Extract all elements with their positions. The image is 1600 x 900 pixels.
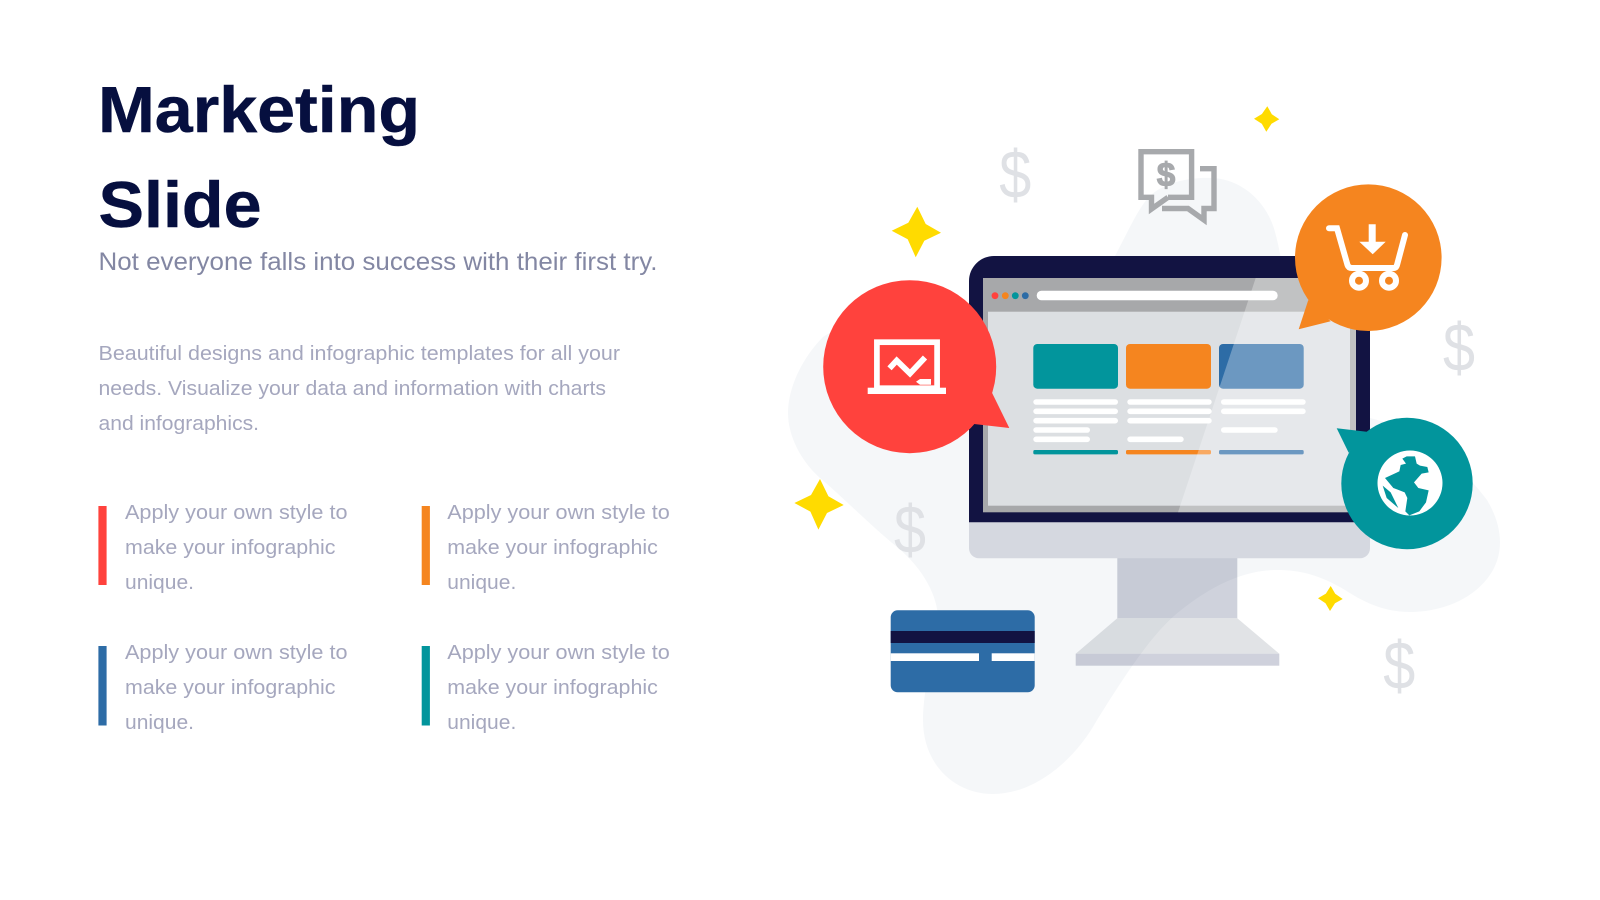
bubble: orange cart bbox=[1295, 184, 1442, 331]
list item: red: Apply your own style to bbox=[125, 501, 348, 524]
icon: globe bbox=[1378, 450, 1442, 516]
body paragraph bbox=[98, 342, 620, 435]
title: Slide bbox=[98, 168, 262, 241]
dollar sign: right: $ bbox=[1443, 310, 1475, 386]
list item: teal bbox=[422, 641, 670, 734]
star: small bottom bbox=[1318, 586, 1343, 611]
icon: shopping cart with arrow bbox=[1329, 224, 1405, 288]
body paragraph: and infographics. bbox=[98, 412, 259, 435]
browser page bbox=[988, 312, 1350, 506]
list item: blue bbox=[98, 641, 348, 734]
list item: orange: unique. bbox=[447, 571, 516, 594]
browser frame bbox=[983, 278, 1356, 512]
list item: red bbox=[98, 501, 348, 594]
star: large left bbox=[794, 479, 844, 530]
progress bars bbox=[1033, 450, 1304, 454]
title: Marketing bbox=[98, 73, 420, 146]
bubble: red chart bbox=[823, 280, 1009, 453]
list item: orange bbox=[422, 501, 670, 594]
monitor stand bbox=[1076, 558, 1279, 666]
bubble: teal globe bbox=[1337, 418, 1473, 549]
screen glare bbox=[1178, 278, 1356, 512]
list item: orange: make your infographic bbox=[447, 536, 658, 559]
list item: blue: unique. bbox=[125, 711, 194, 734]
text lines: column 2 bbox=[1127, 399, 1212, 442]
text lines: column 1 bbox=[1033, 399, 1118, 442]
subtitle: Not everyone falls into success with their first try. bbox=[98, 248, 658, 276]
list item: orange: Apply your own style to bbox=[447, 501, 670, 524]
text lines: column 3 bbox=[1221, 399, 1306, 433]
window dots bbox=[992, 292, 1029, 299]
body paragraph: Beautiful designs and infographic templates for all your bbox=[98, 342, 620, 365]
list item: teal: make your infographic bbox=[447, 676, 658, 699]
title bbox=[98, 73, 420, 241]
dollar sign: top: $ bbox=[999, 137, 1031, 213]
monitor chin bbox=[969, 500, 1370, 558]
list item: blue: Apply your own style to bbox=[125, 641, 348, 664]
list item: red: make your infographic bbox=[125, 536, 336, 559]
body paragraph: needs. Visualize your data and information with charts bbox=[98, 377, 606, 400]
monitor bbox=[969, 256, 1370, 558]
background blob bbox=[788, 178, 1500, 794]
card: orange bbox=[1126, 344, 1211, 389]
card: teal bbox=[1033, 344, 1118, 389]
address bar bbox=[1037, 291, 1278, 300]
monitor bezel bbox=[969, 256, 1370, 522]
star: large top bbox=[892, 207, 941, 257]
star: small top bbox=[1254, 106, 1279, 132]
dollar sign: left: $ bbox=[894, 492, 926, 568]
list item: teal: Apply your own style to bbox=[447, 641, 670, 664]
icon: chat bubbles with dollar: $ bbox=[1157, 156, 1175, 193]
list item: red: unique. bbox=[125, 571, 194, 594]
icon: chat bubbles with dollar bbox=[1141, 152, 1214, 220]
list item: blue: make your infographic bbox=[125, 676, 336, 699]
icon: presentation board bbox=[868, 342, 946, 394]
card: blue bbox=[1219, 344, 1304, 389]
dollar sign: bottom right: $ bbox=[1383, 628, 1415, 704]
list item: teal: unique. bbox=[447, 711, 516, 734]
credit card bbox=[891, 610, 1035, 692]
